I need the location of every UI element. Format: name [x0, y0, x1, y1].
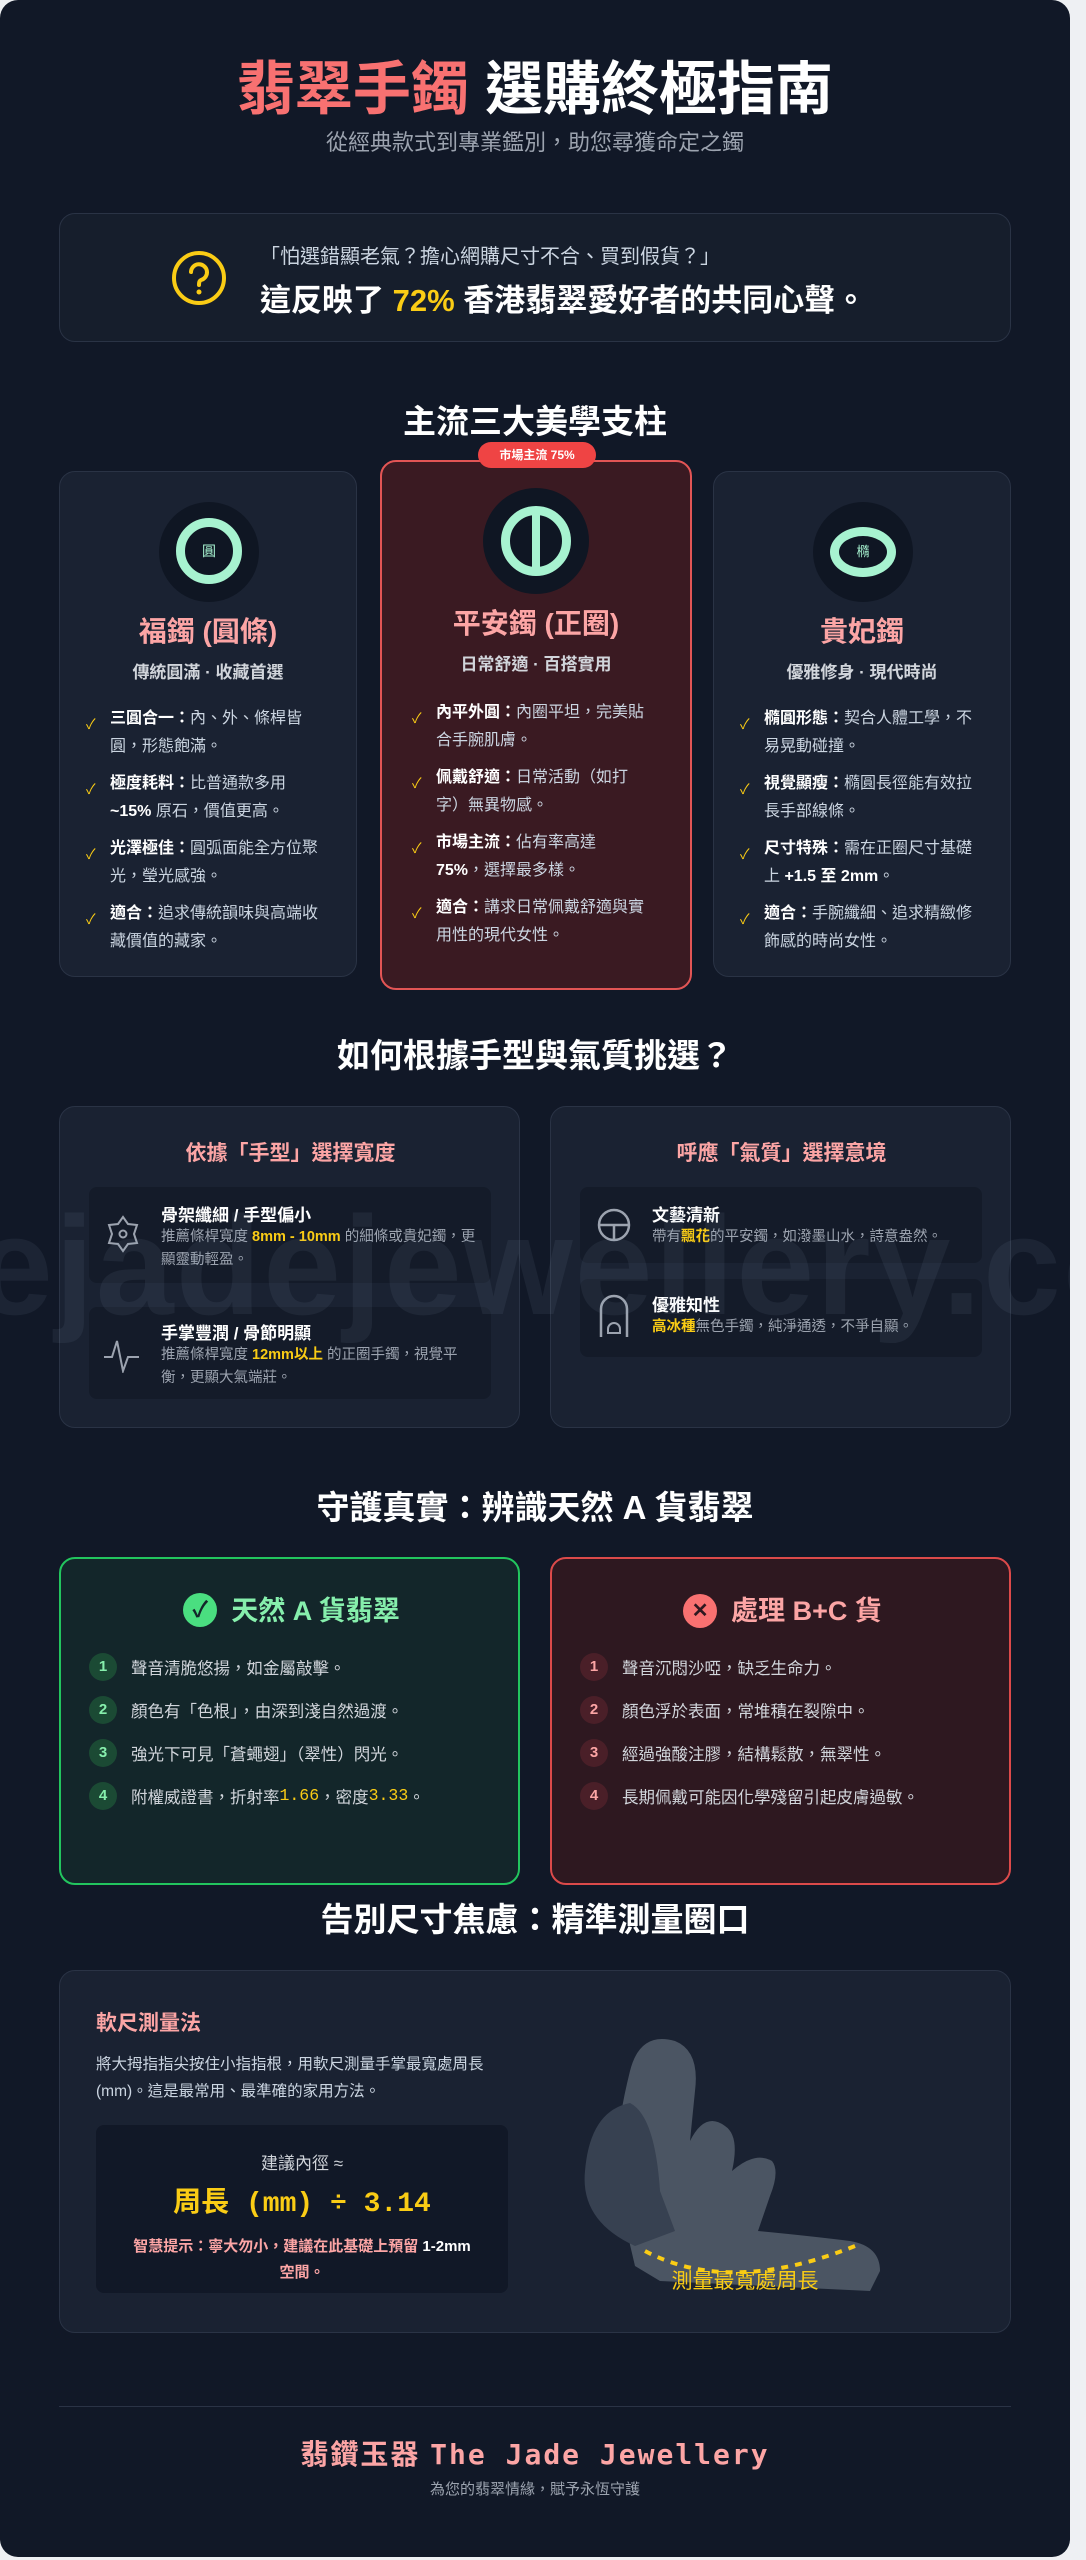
callout text: 這反映了 72% 香港翡翠愛好者的共同心聲。 — [260, 283, 866, 318]
item: slim: 骨架纖細 / 手型偏小 — [161, 1206, 311, 1225]
panel: 平安鐲: 內平外圓：內圈平坦，完美貼合手腕肌膚。 — [436, 704, 644, 749]
footer brand: 翡鑽玉器 The Jade Jewellery — [300, 2438, 770, 2471]
list: 強光下可見「蒼蠅翅」（翠性）閃光。 — [131, 1746, 403, 1764]
panel: 貴妃鐲: 貴妃鐲 — [820, 616, 904, 647]
panel: measure — [59, 1970, 1011, 2333]
panel: 貴妃鐲: 適合：手腕纖細、追求精緻修飾感的時尚女性。 — [764, 905, 972, 950]
item: elegant — [580, 1279, 982, 1357]
badge: 市場主流 75% — [499, 448, 575, 462]
formula box: 智慧提示：寧大勿小，建議在此基礎上預留 1-2mm 空間。 — [133, 2238, 471, 2281]
panel: 貴妃鐲 — [713, 471, 1011, 977]
panel: 貴妃鐲: 橢圓形態：契合人體工學，不易晃動碰撞。 — [764, 710, 972, 755]
icon: flat bangle — [483, 488, 589, 594]
formula box: 周長 (mm) ÷ 3.14 — [173, 2189, 431, 2220]
icon: round bangle: 圓 — [202, 543, 216, 559]
list: 3.33 — [369, 1786, 408, 1805]
list: 1 — [590, 1658, 598, 1674]
panel: 平安鐲: 適合：講求日常佩戴舒適與實用性的現代女性。 — [436, 899, 644, 944]
divider — [59, 2406, 1011, 2407]
list: 長期佩戴可能因化學殘留引起皮膚過敏。 — [622, 1788, 919, 1806]
header: 處理 B+C 貨 — [731, 1596, 882, 1626]
heading: authenticity: 守護真實：辨識天然 A 貨翡翠 — [317, 1489, 753, 1526]
subtitle: 從經典款式到專業鑑別，助您尋獲命定之鐲 — [326, 130, 744, 155]
panel: 貴妃鐲: 視覺顯瘦：橢圓長徑能有效拉長手部線條。 — [764, 775, 972, 820]
header — [183, 1593, 400, 1627]
list: 聲音清脆悠揚，如金屬敲擊。 — [131, 1660, 346, 1678]
callout — [59, 213, 1011, 342]
header — [683, 1594, 882, 1628]
list: 1.66 — [280, 1786, 319, 1805]
hand illustration — [584, 2039, 880, 2293]
list: 顏色有「色根」，由深到淺自然過渡。 — [131, 1702, 403, 1720]
item: wide — [89, 1307, 491, 1399]
panel: 平安鐲: 市場主流：佔有率高達 75%，選擇最多樣。 — [436, 834, 596, 879]
panel: treated B+C — [550, 1557, 1011, 1885]
list: 1 — [99, 1658, 107, 1674]
panel: temperament — [550, 1106, 1011, 1428]
title: 翡翠手鐲 選購終極指南 — [237, 57, 833, 122]
icon: question — [172, 251, 226, 305]
list: 3 — [590, 1744, 598, 1760]
panel: natural A — [59, 1557, 520, 1885]
panel: 貴妃鐲: 優雅修身 · 現代時尚 — [786, 663, 938, 682]
panel title: 呼應「氣質」選擇意境 — [676, 1142, 886, 1165]
footer tagline: 為您的翡翠情緣，賦予永恆守護 — [430, 2481, 640, 2498]
item: elegant: 高冰種無色手鐲，純淨通透，不爭自顯。 — [652, 1319, 913, 1335]
item: wide: 手掌豐潤 / 骨節明顯 — [161, 1324, 311, 1343]
formula box — [96, 2125, 508, 2293]
heading: size: 告別尺寸焦慮：精準測量圈口 — [320, 1901, 750, 1938]
list: 2 — [590, 1700, 598, 1718]
item: literary — [580, 1187, 982, 1263]
badge — [478, 442, 596, 468]
header: ✕ — [692, 1600, 708, 1622]
method text: 將大拇指指尖按住小指指根，用軟尺測量手掌最寬處周長 (mm)。這是最常用、最準確的家用方法。 — [96, 2056, 484, 2100]
heading: choose: 如何根據手型與氣質挑選？ — [337, 1037, 733, 1074]
item: slim — [89, 1187, 491, 1283]
method title: 軟尺測量法 — [96, 2012, 201, 2035]
list: 2 — [99, 1700, 107, 1718]
list: 經過強酸注膠，結構鬆散，無翠性。 — [622, 1746, 886, 1764]
list: 4 — [590, 1786, 598, 1804]
list: 附權威證書，折射率 ，密度 。 — [131, 1788, 425, 1806]
list — [89, 1653, 425, 1810]
icon: oval bangle — [813, 502, 913, 602]
panel: 福鐲: 適合：追求傳統韻味與高端收藏價值的藏家。 — [110, 905, 318, 950]
panel: 平安鐲 — [380, 460, 692, 990]
panel: 福鐲: 傳統圓滿 · 收藏首選 — [132, 663, 284, 682]
header: 天然 A 貨翡翠 — [231, 1596, 400, 1626]
item: literary: 文藝清新 — [652, 1206, 720, 1225]
panel: hand type — [59, 1106, 520, 1428]
list: 聲音沉悶沙啞，缺乏生命力。 — [622, 1660, 836, 1678]
list — [580, 1653, 919, 1810]
panel: 福鐲: 光澤極佳：圓弧面能全方位聚光，瑩光感強。 — [110, 840, 318, 885]
panel: 福鐲: 福鐲 (圓條) — [139, 616, 277, 647]
hand illustration: 測量最寬處周長 — [672, 2270, 818, 2293]
icon: oval bangle: 橢 — [856, 544, 870, 559]
panel: 貴妃鐲: 尺寸特殊：需在正圈尺寸基礎上 +1.5 至 2mm。 — [764, 840, 972, 885]
icon: round bangle — [159, 502, 259, 602]
list: 4 — [99, 1786, 107, 1804]
panel: 福鐲: 三圓合一：內、外、條桿皆圓，形態飽滿。 — [110, 710, 302, 755]
panel: 平安鐲: 日常舒適 · 百搭實用 — [460, 655, 612, 674]
list: 3 — [99, 1744, 107, 1760]
heading: pillars: 主流三大美學支柱 — [403, 403, 667, 440]
panel: 平安鐲: 平安鐲 (正圈) — [453, 608, 619, 639]
item: slim: 推薦條桿寬度 8mm - 10mm 的細條或貴妃鐲，更顯靈動輕盈。 — [161, 1229, 475, 1268]
item: wide: 推薦條桿寬度 12mm以上 的正圈手鐲，視覺平衡，更顯大氣端莊。 — [161, 1347, 457, 1386]
list: 顏色浮於表面，常堆積在裂隙中。 — [622, 1702, 870, 1720]
panel: 平安鐲: 佩戴舒適：日常活動（如打字）無異物感。 — [436, 769, 628, 814]
callout text: 「怕選錯顯老氣？擔心網購尺寸不合、買到假貨？」 — [260, 246, 720, 268]
panel: 福鐲: 極度耗料：比普通款多用 ~15% 原石，價值更高。 — [110, 775, 286, 820]
header: ✓ — [192, 1597, 208, 1622]
panel title: 依據「手型」選擇寬度 — [186, 1142, 396, 1165]
item: literary: 帶有飄花的平安鐲，如潑墨山水，詩意盎然。 — [652, 1229, 942, 1245]
formula box: 建議內徑 ≈ — [261, 2154, 343, 2173]
item: elegant: 優雅知性 — [652, 1296, 720, 1315]
panel: 福鐲 — [59, 471, 357, 977]
callout text — [260, 246, 866, 318]
